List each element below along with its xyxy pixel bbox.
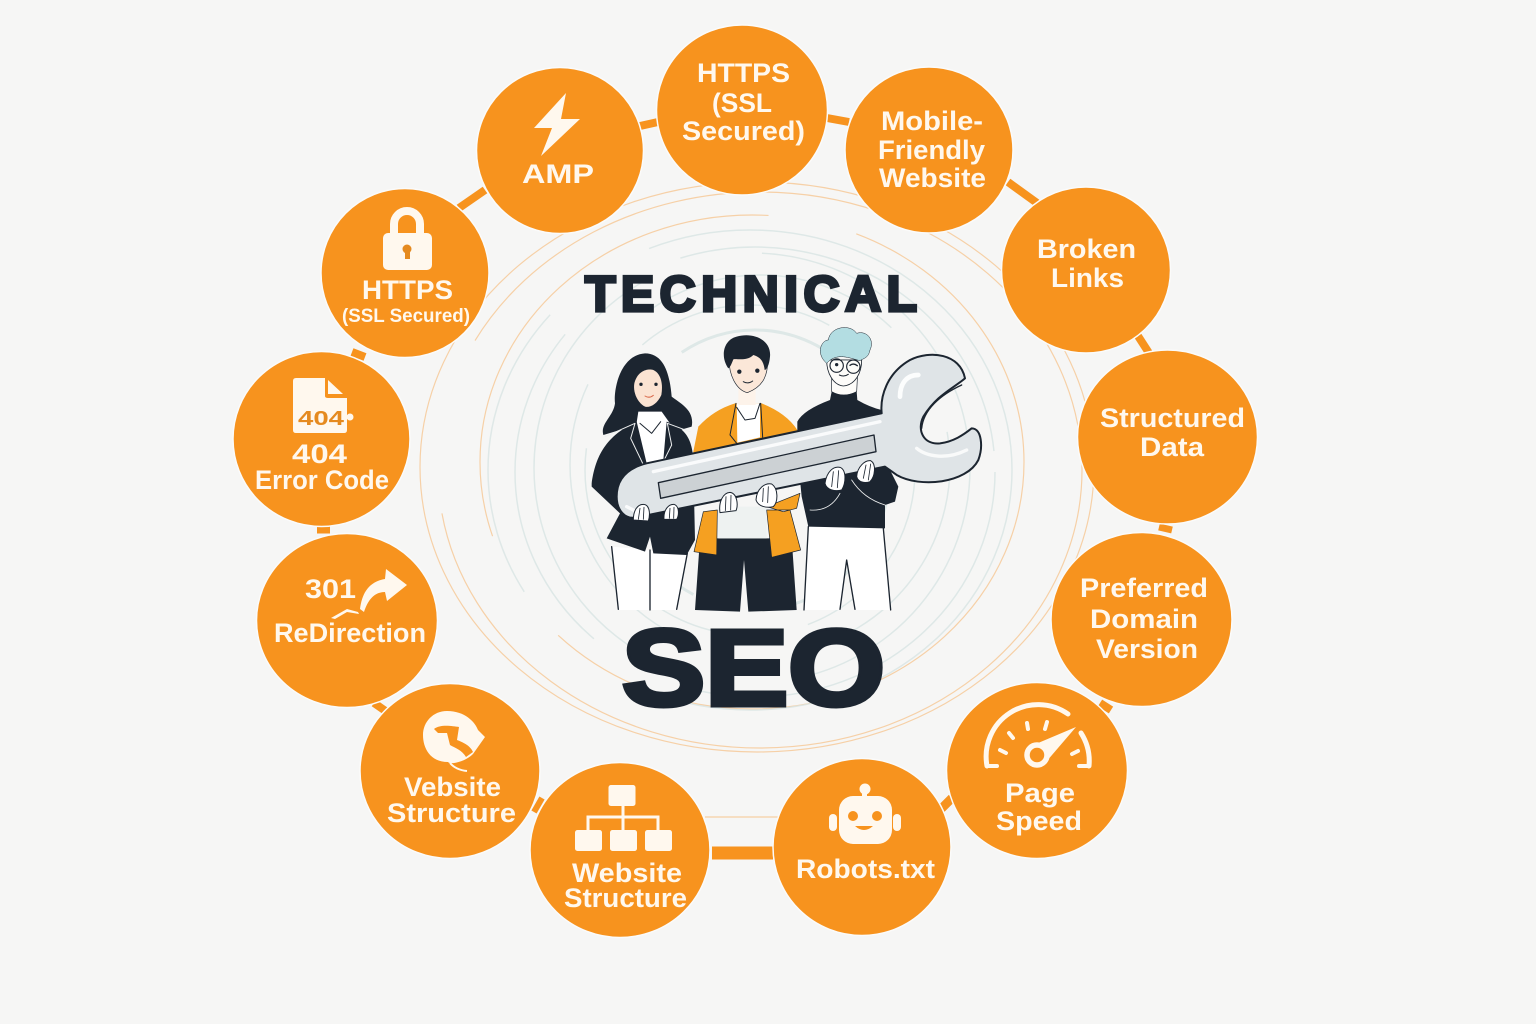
node: Page Speed: Page (1005, 778, 1075, 808)
node: Website Structure with sitemap (530, 762, 710, 938)
node: Vebsite Structure (360, 684, 540, 858)
background swirl rings (420, 182, 1094, 752)
node: Structured Data: Structured (1100, 403, 1245, 433)
node: Structured Data (1078, 350, 1258, 524)
connector ring segments (317, 118, 1172, 853)
icon: padlock (383, 211, 432, 270)
node: HTTPS (SSL Secured) top (656, 25, 828, 195)
node: Website Structure with sitemap: Structure (564, 883, 687, 913)
node: 404 Error Code (233, 352, 410, 526)
node: AMP: AMP (522, 159, 594, 189)
illustration: team holding a giant wrench (592, 328, 981, 612)
node: Broken Links (1002, 187, 1170, 353)
node: Robots.txt (773, 758, 951, 936)
person: man in orange jacket (693, 335, 801, 612)
icon: 404 file: 404 (298, 408, 345, 430)
node: Preferred Domain Version: Preferred (1080, 573, 1208, 603)
node: Page Speed (946, 682, 1128, 858)
node: Page Speed: Speed (996, 806, 1082, 836)
node: 404 Error Code: Error Code (255, 465, 389, 495)
node: HTTPS (SSL Secured) with lock: HTTPS (362, 275, 453, 305)
node: HTTPS (SSL Secured) top: (SSL (712, 88, 772, 118)
person: man with blue hair and glasses (797, 328, 898, 610)
node: 404 Error Code: 404 (292, 439, 347, 469)
icon: lightning bolt (534, 93, 580, 156)
node: HTTPS (SSL Secured) with lock: (SSL Secured) (342, 306, 470, 327)
icon: sitemap tree (575, 785, 672, 851)
node: Website Structure with sitemap: Website (572, 858, 682, 888)
title: SEO: SEO (622, 607, 885, 728)
icon: 404 file (293, 378, 354, 433)
node: HTTPS (SSL Secured) top: Secured) (682, 116, 805, 146)
node: 301 ReDirection (256, 534, 438, 708)
node: 301 ReDirection: ReDirection (274, 618, 426, 648)
node: Broken Links: Links (1051, 263, 1124, 293)
node: AMP (476, 68, 644, 234)
icon: giant wrench (617, 355, 981, 518)
node: Vebsite Structure: Structure (387, 798, 516, 828)
title: TECHNICAL: TECHNICAL (585, 266, 917, 322)
node: Robots.txt: Robots.txt (796, 854, 935, 884)
icon: circular arrow glyph (423, 711, 485, 771)
node: Preferred Domain Version (1051, 532, 1232, 706)
node: Mobile-Friendly Website (845, 67, 1013, 233)
icon: speedometer (986, 705, 1089, 766)
node: HTTPS (SSL Secured) with lock (321, 188, 489, 358)
icon: redirect arrow (331, 569, 407, 619)
node: Preferred Domain Version: Domain (1090, 604, 1198, 634)
node: Structured Data: Data (1140, 432, 1205, 462)
node: Mobile-Friendly Website: Mobile- (881, 106, 983, 136)
icon: robot (829, 784, 901, 844)
node: HTTPS (SSL Secured) top: HTTPS (697, 58, 790, 88)
node: Mobile-Friendly Website: Website (879, 163, 986, 193)
node: 301 ReDirection: 301 (305, 574, 356, 604)
node: Broken Links: Broken (1037, 234, 1136, 264)
person: woman in black blazer (592, 353, 695, 610)
hands gripping the wrench (633, 461, 875, 521)
node: Mobile-Friendly Website: Friendly (878, 135, 985, 165)
node: Vebsite Structure: Vebsite (404, 772, 501, 802)
node: Preferred Domain Version: Version (1096, 634, 1198, 664)
